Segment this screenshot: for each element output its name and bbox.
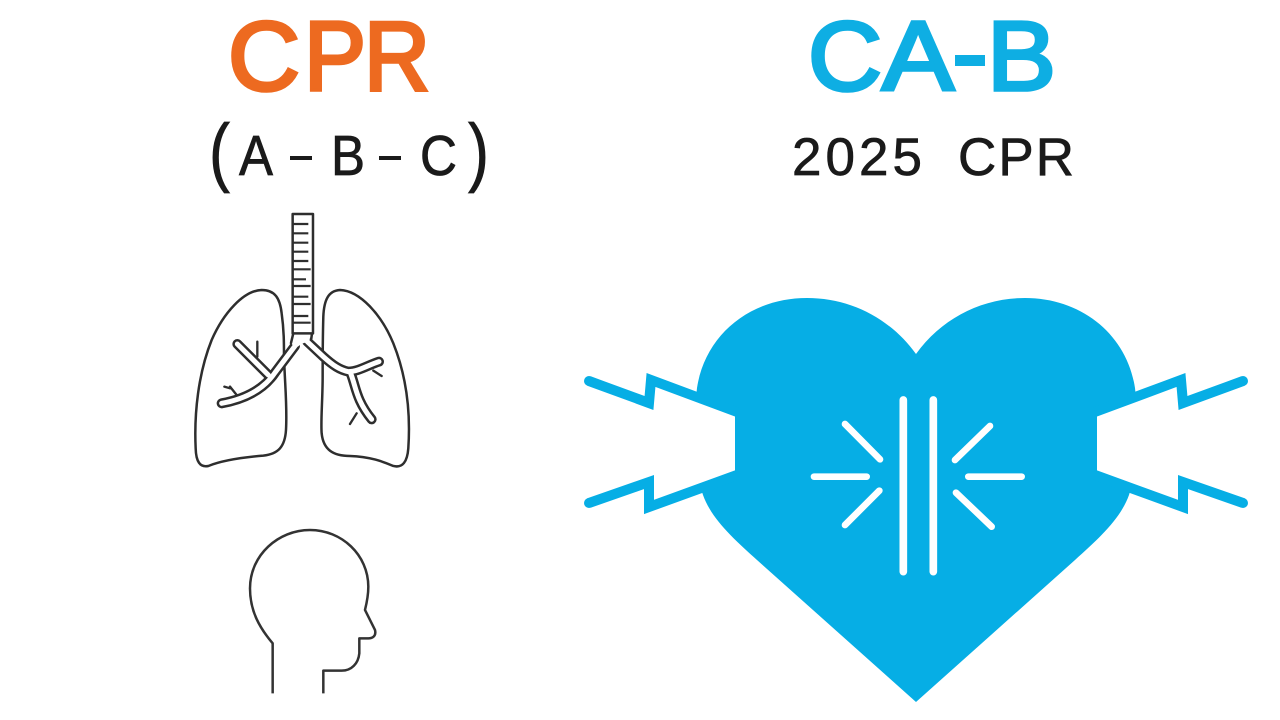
right lung	[321, 290, 409, 466]
heart	[695, 298, 1137, 702]
heading: CPR: P	[304, 1, 366, 111]
subheading: 2025 CPR: 2025	[792, 128, 922, 187]
left notch	[560, 360, 735, 520]
icon: lungs	[195, 214, 409, 466]
subheading: A-B-C: (	[209, 109, 230, 194]
compression bars and rays	[814, 400, 1022, 572]
bronchi	[222, 333, 382, 424]
subheading: A-B-C	[209, 109, 489, 194]
left lightning arrows	[584, 376, 737, 508]
panel: CPR A-B-C	[195, 1, 489, 693]
heading: CA-B: B	[987, 1, 1056, 111]
heading: CA-B: A	[882, 1, 955, 111]
trachea	[293, 214, 313, 333]
heading: CA-B: C	[808, 1, 882, 111]
heading: CPR	[228, 1, 430, 111]
subheading: A-B-C: A	[239, 124, 273, 188]
subheading: 2025 CPR: CPR	[958, 128, 1074, 187]
right notch	[1097, 360, 1272, 520]
subheading: 2025 CPR	[792, 128, 1074, 187]
icon: head profile	[250, 530, 375, 693]
panel: CA-B 2025 CPR	[560, 1, 1272, 702]
icon: heart with compression	[560, 298, 1272, 702]
subheading: A-B-C: B	[331, 124, 365, 188]
left lung	[195, 290, 286, 466]
heading: CPR: R	[364, 1, 430, 111]
right lightning arrows	[1095, 376, 1248, 508]
heading: CA-B	[808, 1, 1056, 111]
subheading: A-B-C: )	[468, 109, 489, 194]
subheading: A-B-C: C	[420, 124, 457, 188]
heading: CPR: C	[228, 1, 300, 111]
